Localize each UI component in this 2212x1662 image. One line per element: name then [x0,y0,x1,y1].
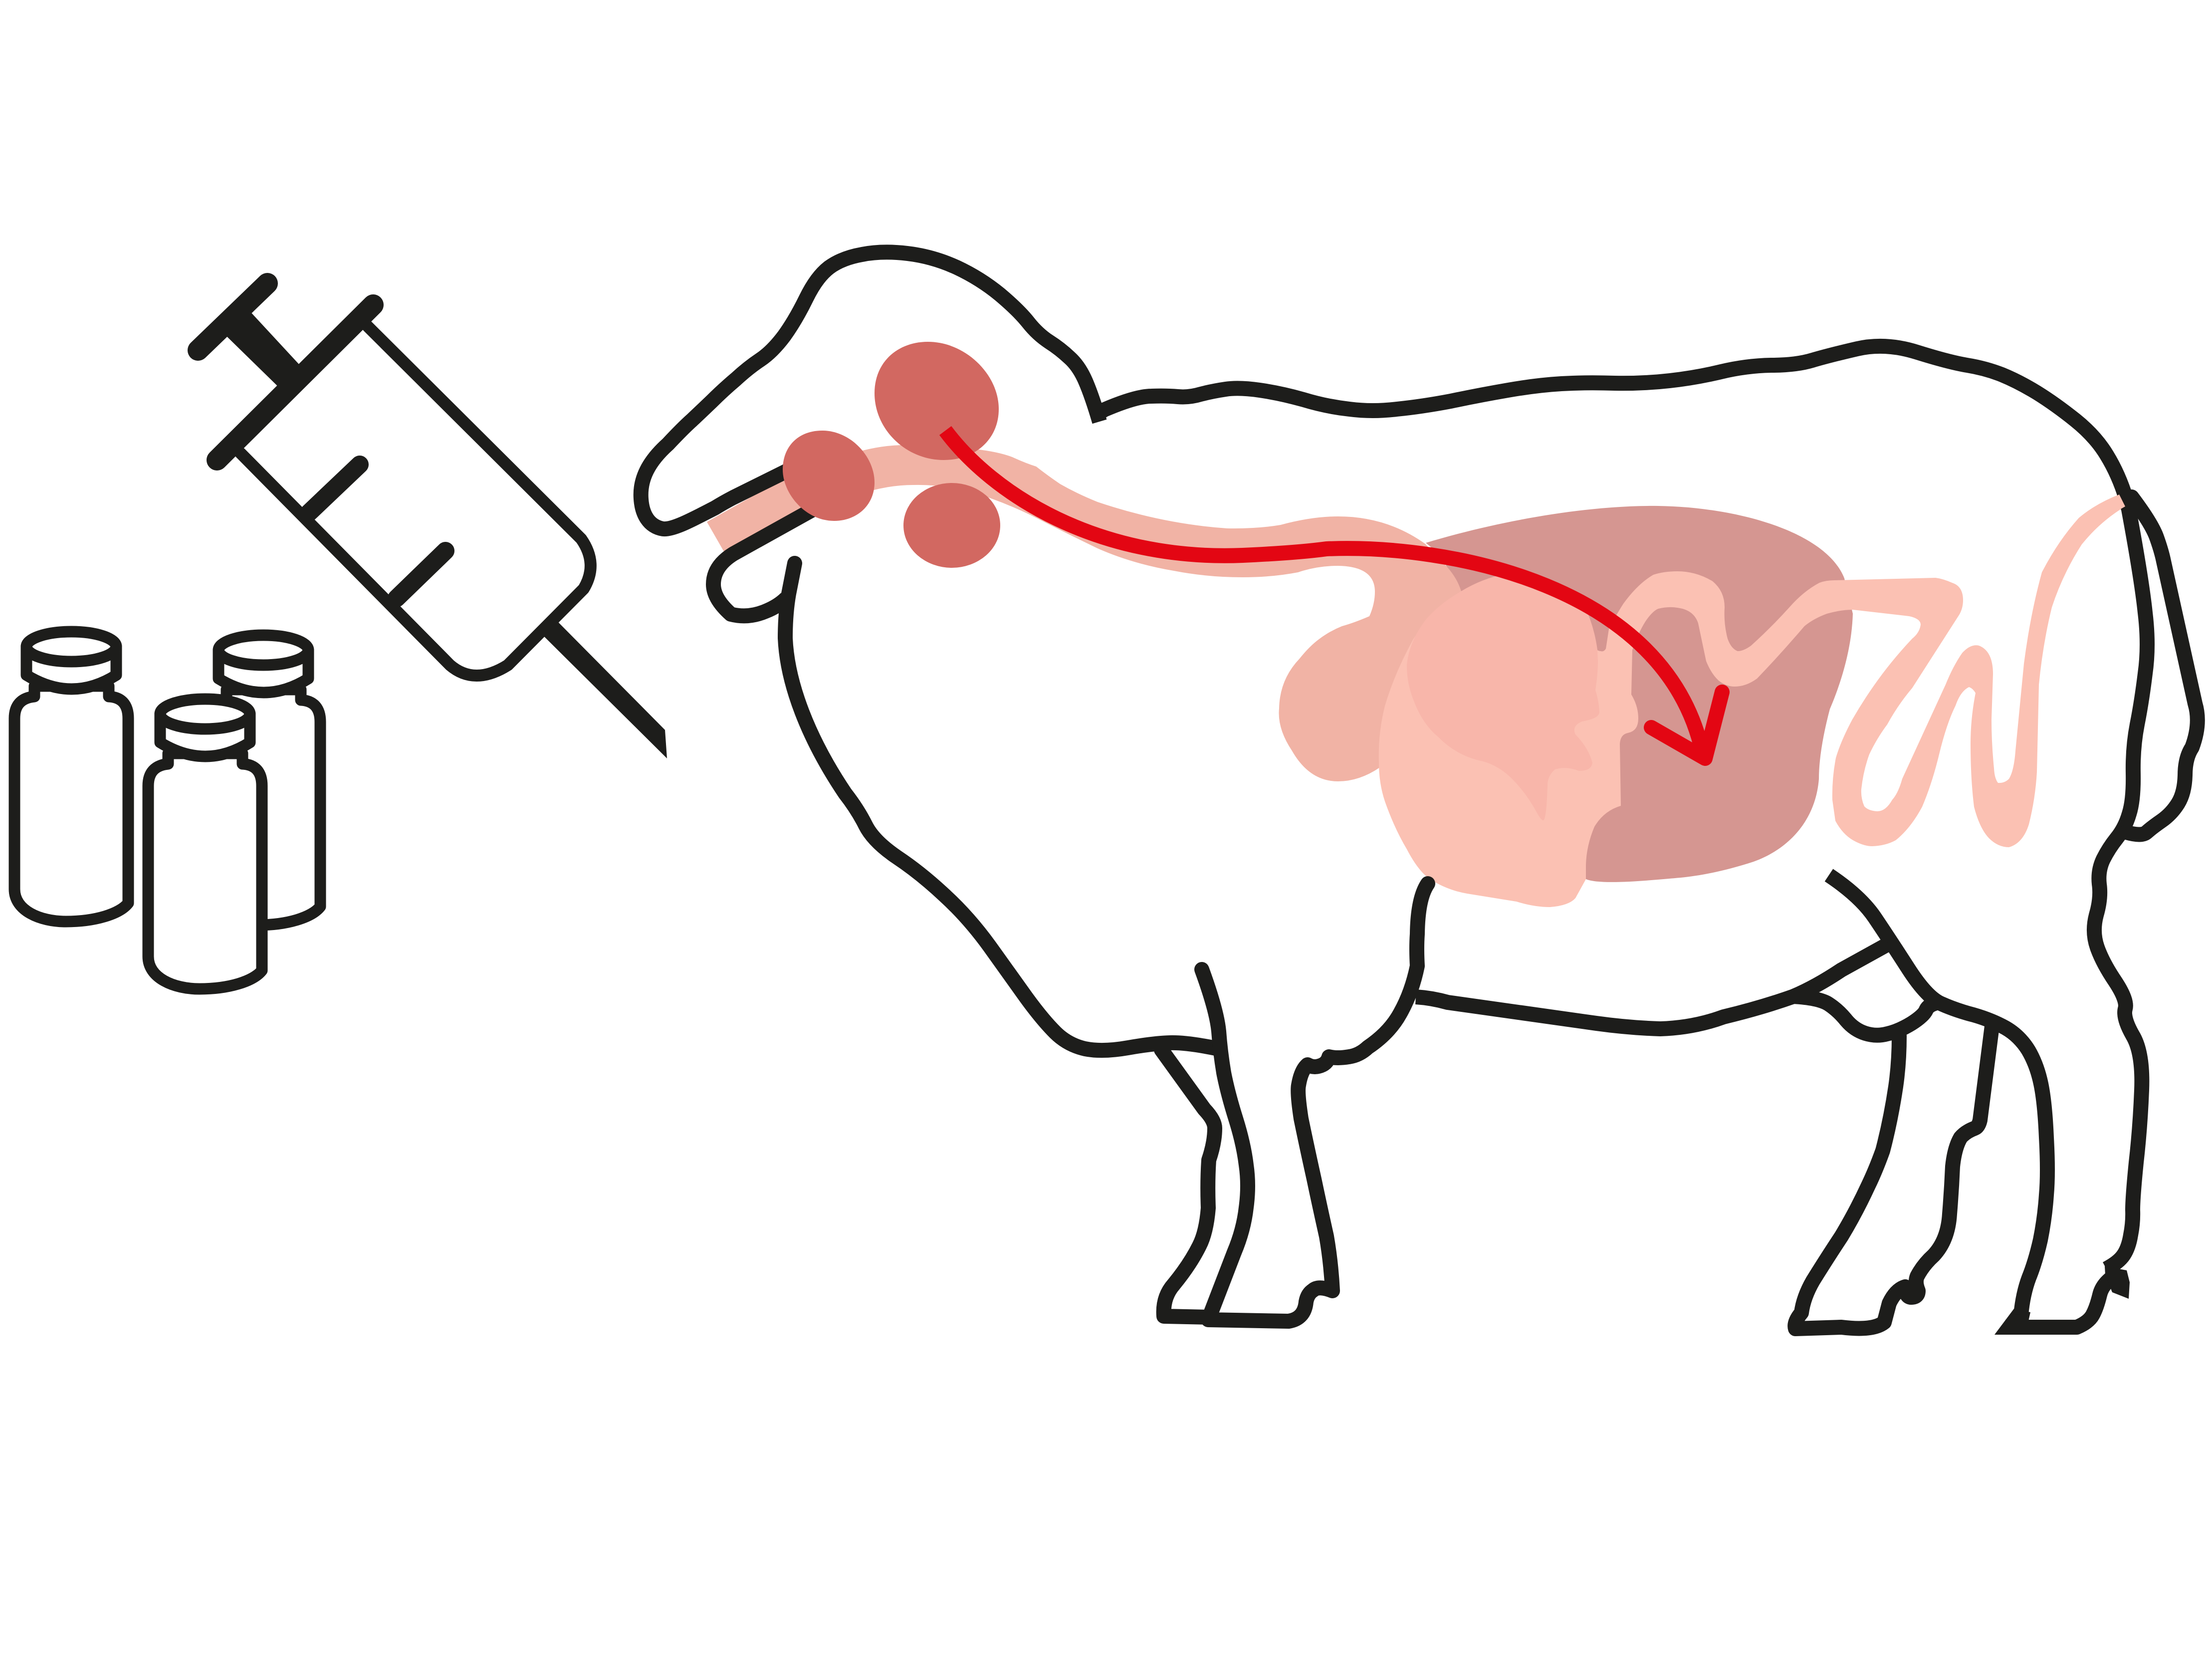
icon: vial back right [207,635,320,925]
arrow: vaccine route to gut [945,431,1722,758]
chest [785,563,1218,1050]
foreleg far [1161,1050,1215,1317]
tail [2126,497,2198,834]
gland: lymph node lower [903,483,1000,568]
hind foot tips [1994,1266,2130,1335]
belly [1416,944,1888,1029]
lower jaw [713,505,821,616]
gland: retropharyngeal lymph node [875,342,999,460]
icon: vial front [148,699,262,989]
intestine end over rump [2103,494,2125,516]
icon: vial left [14,632,128,922]
organ: abomasum [1407,574,1599,820]
foreleg near [1202,884,1428,1321]
hind foot [2005,1274,2118,1327]
sheep outline [641,252,2198,1335]
organ: esophagus and reticulum [707,445,1461,781]
back [1096,346,2126,499]
gland: tonsil [783,431,875,521]
organ: rumen and small intestine [1379,494,2125,907]
hind leg far [1795,1026,1992,1329]
organ: liver [1426,506,1853,882]
icon: syringe [198,283,667,758]
hind leg back [1829,875,2047,1315]
flank [1793,996,1939,1035]
head [641,252,1100,529]
rump [2094,491,2147,1269]
